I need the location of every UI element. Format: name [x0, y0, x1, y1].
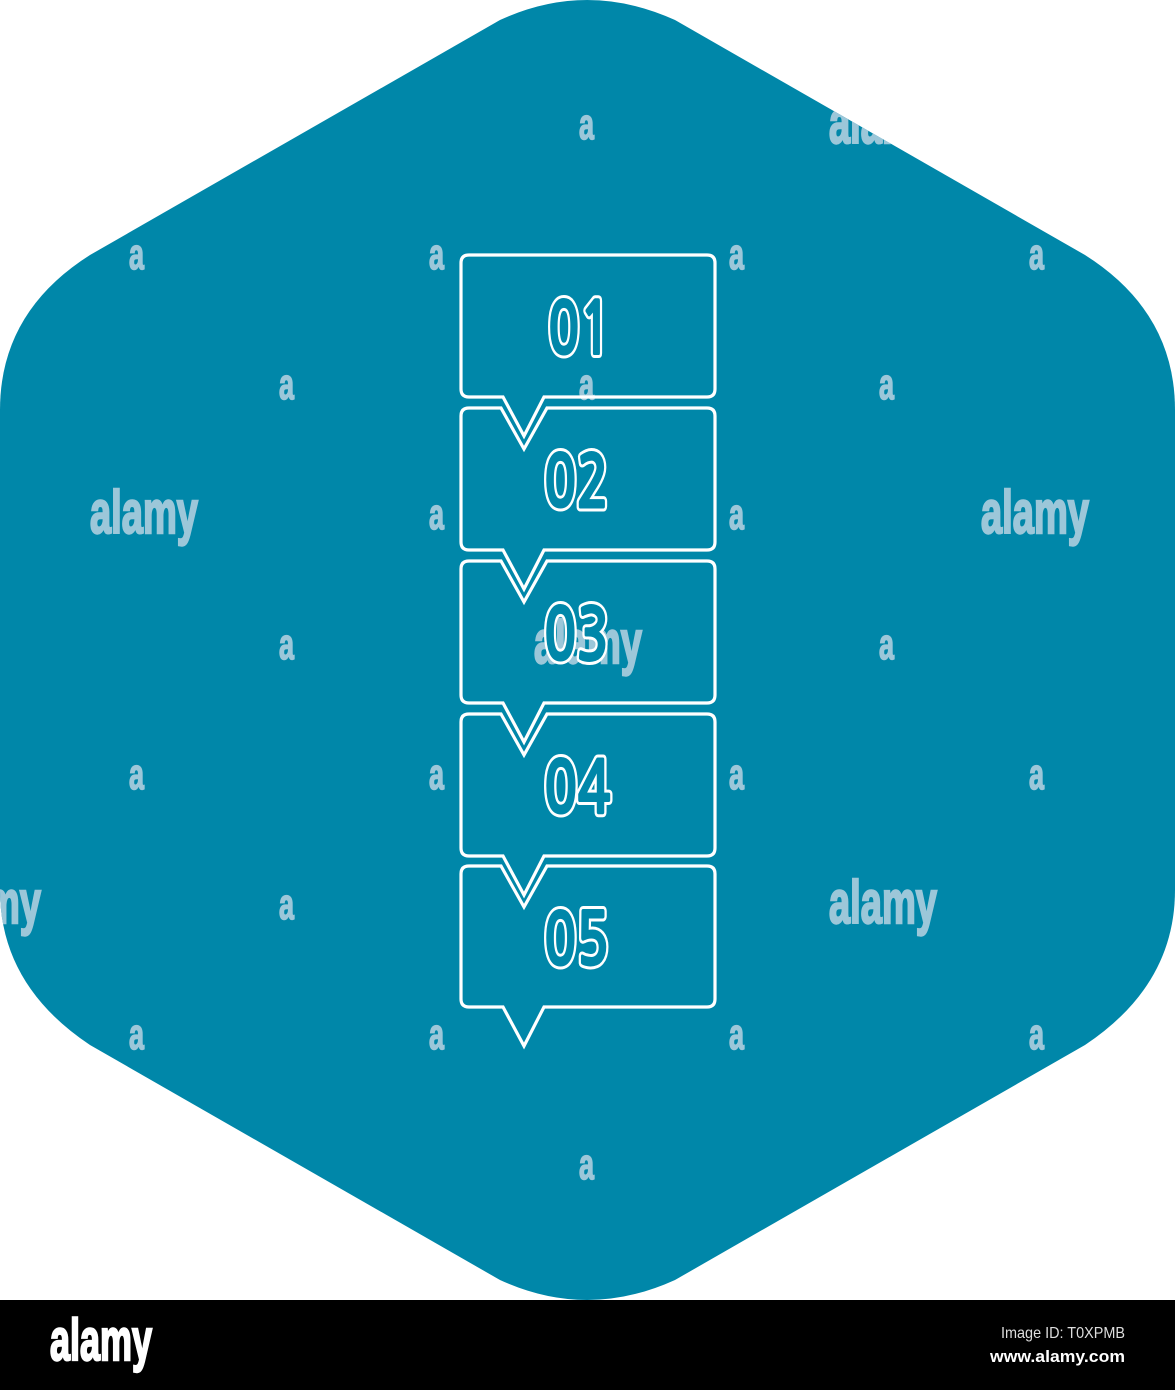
watermark pattern: a: [1029, 750, 1044, 799]
bubble 01: [461, 255, 715, 436]
image id: Image ID: T0XPMB: [1001, 1325, 1125, 1342]
watermark pattern: alamy: [829, 89, 937, 156]
watermark pattern: a: [129, 1010, 144, 1059]
bubble 02: [461, 408, 715, 589]
bubble 04: 04: [544, 752, 611, 824]
watermark pattern: a: [879, 620, 894, 669]
watermark pattern: a: [1029, 230, 1044, 279]
bubble 05: 05: [544, 904, 609, 976]
watermark pattern: a: [729, 230, 744, 279]
watermark pattern: a: [429, 490, 444, 539]
watermark pattern: a: [729, 1010, 744, 1059]
watermark pattern: alamy: [90, 479, 198, 546]
watermark pattern: a: [279, 620, 294, 669]
watermark pattern: a: [129, 230, 144, 279]
bubble 02: 02: [544, 446, 609, 518]
watermark pattern: a: [1029, 1010, 1044, 1059]
bubble 02: 02: [544, 446, 609, 518]
watermark pattern: a: [579, 100, 594, 149]
watermark pattern: a: [279, 360, 294, 409]
watermark pattern: a: [579, 360, 594, 409]
watermark pattern: [0, 89, 1089, 1189]
website: www.alamy.com: [989, 1347, 1125, 1366]
watermark pattern: a: [429, 750, 444, 799]
bubble 03: 03: [544, 599, 609, 671]
footer logo: alamy: [50, 1308, 152, 1373]
watermark pattern: alamy: [981, 479, 1089, 546]
watermark pattern: a: [429, 230, 444, 279]
watermark pattern: a: [729, 490, 744, 539]
bubble 01: 01: [548, 293, 611, 365]
watermark pattern: a: [579, 1140, 594, 1189]
watermark pattern: a: [279, 880, 294, 929]
bubble 03: 03: [544, 599, 609, 671]
watermark pattern: a: [429, 1010, 444, 1059]
bubble 04: [461, 714, 715, 895]
footer bar: [0, 1300, 1175, 1390]
bubble 05: 05: [544, 904, 609, 976]
watermark pattern: alamy: [534, 609, 642, 676]
bubble 01: 01: [548, 293, 611, 365]
stacked numbered speech bubbles: [461, 255, 715, 1046]
bubble 03: [461, 561, 715, 742]
watermark pattern: a: [129, 750, 144, 799]
bubble 05: [461, 866, 715, 1046]
watermark pattern: alamy: [829, 869, 937, 936]
watermark pattern: a: [729, 750, 744, 799]
watermark pattern: a: [879, 360, 894, 409]
bubble 04: 04: [544, 752, 611, 824]
